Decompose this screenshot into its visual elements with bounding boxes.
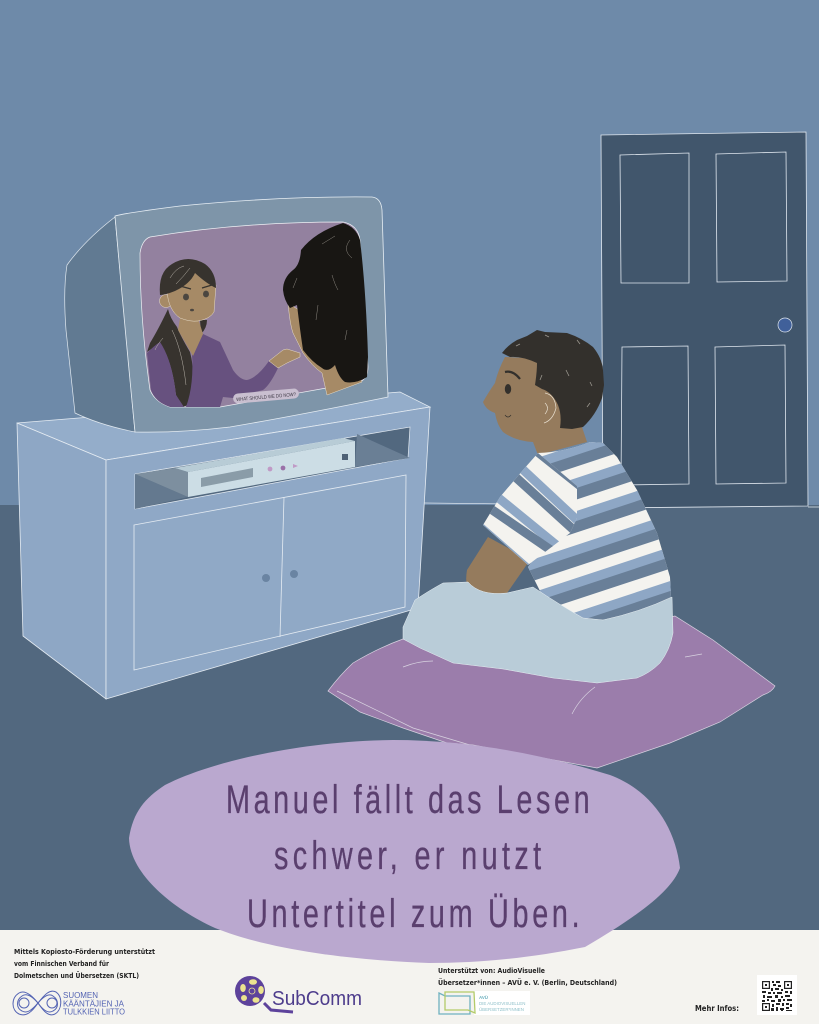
door bbox=[601, 132, 808, 508]
SubComm logo bbox=[235, 976, 362, 1012]
speech bubble bbox=[129, 740, 680, 963]
tv screen bbox=[140, 222, 368, 407]
boy ear line bbox=[544, 393, 556, 423]
floor bbox=[0, 505, 819, 931]
tv cabinet bbox=[17, 392, 430, 699]
subtitle pill: WHAT SHOULD WE DO NOW? bbox=[236, 392, 296, 403]
floor pillow bbox=[328, 616, 775, 768]
floor line bbox=[424, 503, 819, 507]
SubComm logo: SubComm bbox=[272, 988, 362, 1010]
QR code bbox=[757, 975, 797, 1015]
television bbox=[65, 197, 388, 432]
boy ear bbox=[540, 390, 560, 423]
man seen from behind bbox=[283, 223, 368, 395]
SKTL logo: TULKKIEN LIITTO bbox=[63, 1008, 125, 1016]
boy arm bbox=[466, 537, 530, 595]
funding note left: Dolmetschen und Übersetzen (SKTL) bbox=[14, 971, 139, 980]
boy hair bbox=[502, 330, 604, 429]
woman on screen bbox=[147, 259, 300, 407]
cabinet doors bbox=[134, 475, 406, 670]
vcr player bbox=[175, 438, 355, 497]
boy eye and smile bbox=[505, 372, 520, 417]
support note right: Unterstützt von: AudioVisuelle bbox=[438, 967, 545, 975]
boy shirt sleeve bbox=[483, 453, 577, 565]
seated boy bbox=[403, 330, 700, 683]
subtitle pill bbox=[233, 388, 299, 404]
wall bbox=[0, 0, 819, 506]
AVÜ logo: AVÜ bbox=[479, 995, 488, 1000]
boy shirt body bbox=[528, 442, 671, 620]
boy face and neck bbox=[483, 357, 587, 455]
AVÜ logo: ÜBERSETZER*INNEN bbox=[479, 1007, 524, 1012]
more info label: Mehr Infos: bbox=[695, 1004, 739, 1013]
funding note left: Mittels Kopiosto-Förderung unterstützt bbox=[14, 948, 156, 956]
speech bubble text bbox=[226, 777, 590, 936]
funding note left: vom Finnischen Verband für bbox=[14, 960, 110, 968]
cabinet shelf bbox=[135, 427, 410, 509]
AVÜ logo: DIE AUDIOVISUELLEN bbox=[479, 1001, 525, 1006]
SKTL logo bbox=[13, 991, 125, 1016]
support note right bbox=[438, 967, 617, 987]
footer band bbox=[0, 930, 819, 1024]
support note right: Übersetzer*innen – AVÜ e. V. (Berlin, Deutschland) bbox=[438, 978, 617, 987]
SKTL logo: SUOMEN bbox=[63, 991, 98, 1000]
speech bubble text: Manuel fällt das Lesen bbox=[226, 777, 590, 822]
speech bubble text: Untertitel zum Üben. bbox=[247, 891, 580, 936]
AVÜ logo bbox=[439, 991, 530, 1015]
boy trousers bbox=[403, 582, 673, 683]
speech bubble text: schwer, er nutzt bbox=[274, 833, 541, 878]
funding note left bbox=[14, 948, 156, 980]
SKTL logo: KÄÄNTÄJIEN JA bbox=[63, 998, 125, 1008]
